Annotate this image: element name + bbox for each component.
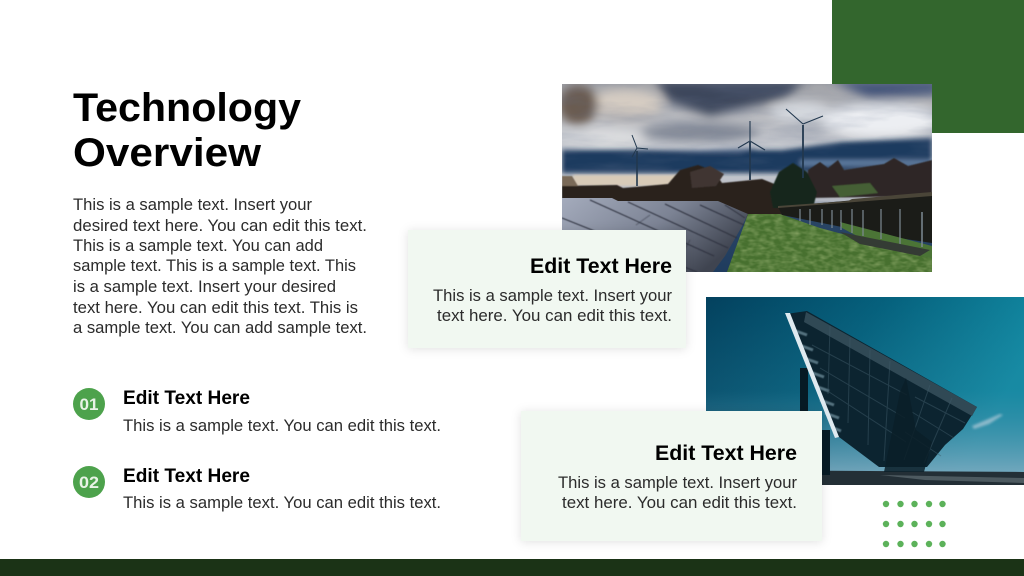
badge 02 bbox=[73, 466, 105, 498]
intro text block: desired text here. You can edit this text. bbox=[73, 217, 367, 235]
list item 01: Edit Text Here bbox=[123, 388, 250, 409]
card: lower caption: Edit Text Here bbox=[655, 442, 797, 465]
title bbox=[73, 86, 302, 175]
intro text block: a sample text. You can add sample text. bbox=[73, 319, 367, 337]
photo: wind turbines and solar field bbox=[555, 80, 940, 275]
list item 01: This is a sample text. You can edit this text. bbox=[123, 417, 441, 435]
solar panels left bbox=[562, 198, 748, 272]
intro text block: This is a sample text. You can add bbox=[73, 237, 323, 255]
card: upper caption bbox=[408, 230, 686, 348]
card: lower caption bbox=[521, 411, 822, 541]
card: upper caption: Edit Text Here bbox=[530, 255, 672, 278]
clouds bbox=[555, 80, 940, 147]
green corner block bbox=[832, 0, 1024, 133]
photo: solar panel against blue sky bbox=[700, 297, 1024, 485]
treeline bbox=[562, 158, 932, 217]
intro text block: is a sample text. Insert your desired bbox=[73, 278, 336, 296]
turbines bbox=[632, 109, 823, 186]
title: Technology bbox=[73, 86, 302, 130]
card: upper caption: text here. You can edit this text. bbox=[437, 307, 672, 325]
intro text block: This is a sample text. Insert your bbox=[73, 196, 312, 214]
intro text block: text here. You can edit this text. This is bbox=[73, 299, 358, 317]
wispy cloud bbox=[972, 414, 1003, 429]
bottom bar bbox=[0, 559, 1024, 576]
list item 01 bbox=[73, 388, 441, 435]
solar rack right bbox=[778, 193, 932, 243]
posts bbox=[800, 368, 830, 475]
grass bbox=[727, 214, 932, 272]
badge 01: 01 bbox=[80, 395, 98, 414]
list item 02: Edit Text Here bbox=[123, 466, 250, 487]
dot grid decoration bbox=[883, 501, 946, 547]
card: lower caption: This is a sample text. Insert your bbox=[558, 474, 797, 492]
panel body bbox=[786, 311, 977, 467]
badge 01 bbox=[73, 388, 105, 420]
card: lower caption: text here. You can edit this text. bbox=[562, 494, 797, 512]
intro text block bbox=[73, 196, 367, 337]
intro text block: sample text. This is a sample text. This bbox=[73, 257, 356, 275]
badge 02: 02 bbox=[79, 473, 99, 492]
panel ribs bbox=[793, 330, 841, 431]
list item 02: This is a sample text. You can edit this text. bbox=[123, 494, 441, 512]
ground bbox=[822, 470, 1024, 485]
list item 02 bbox=[73, 466, 441, 512]
card: upper caption: This is a sample text. Insert your bbox=[433, 287, 672, 305]
title: Overview bbox=[73, 131, 262, 175]
white panel edge bbox=[785, 313, 839, 438]
